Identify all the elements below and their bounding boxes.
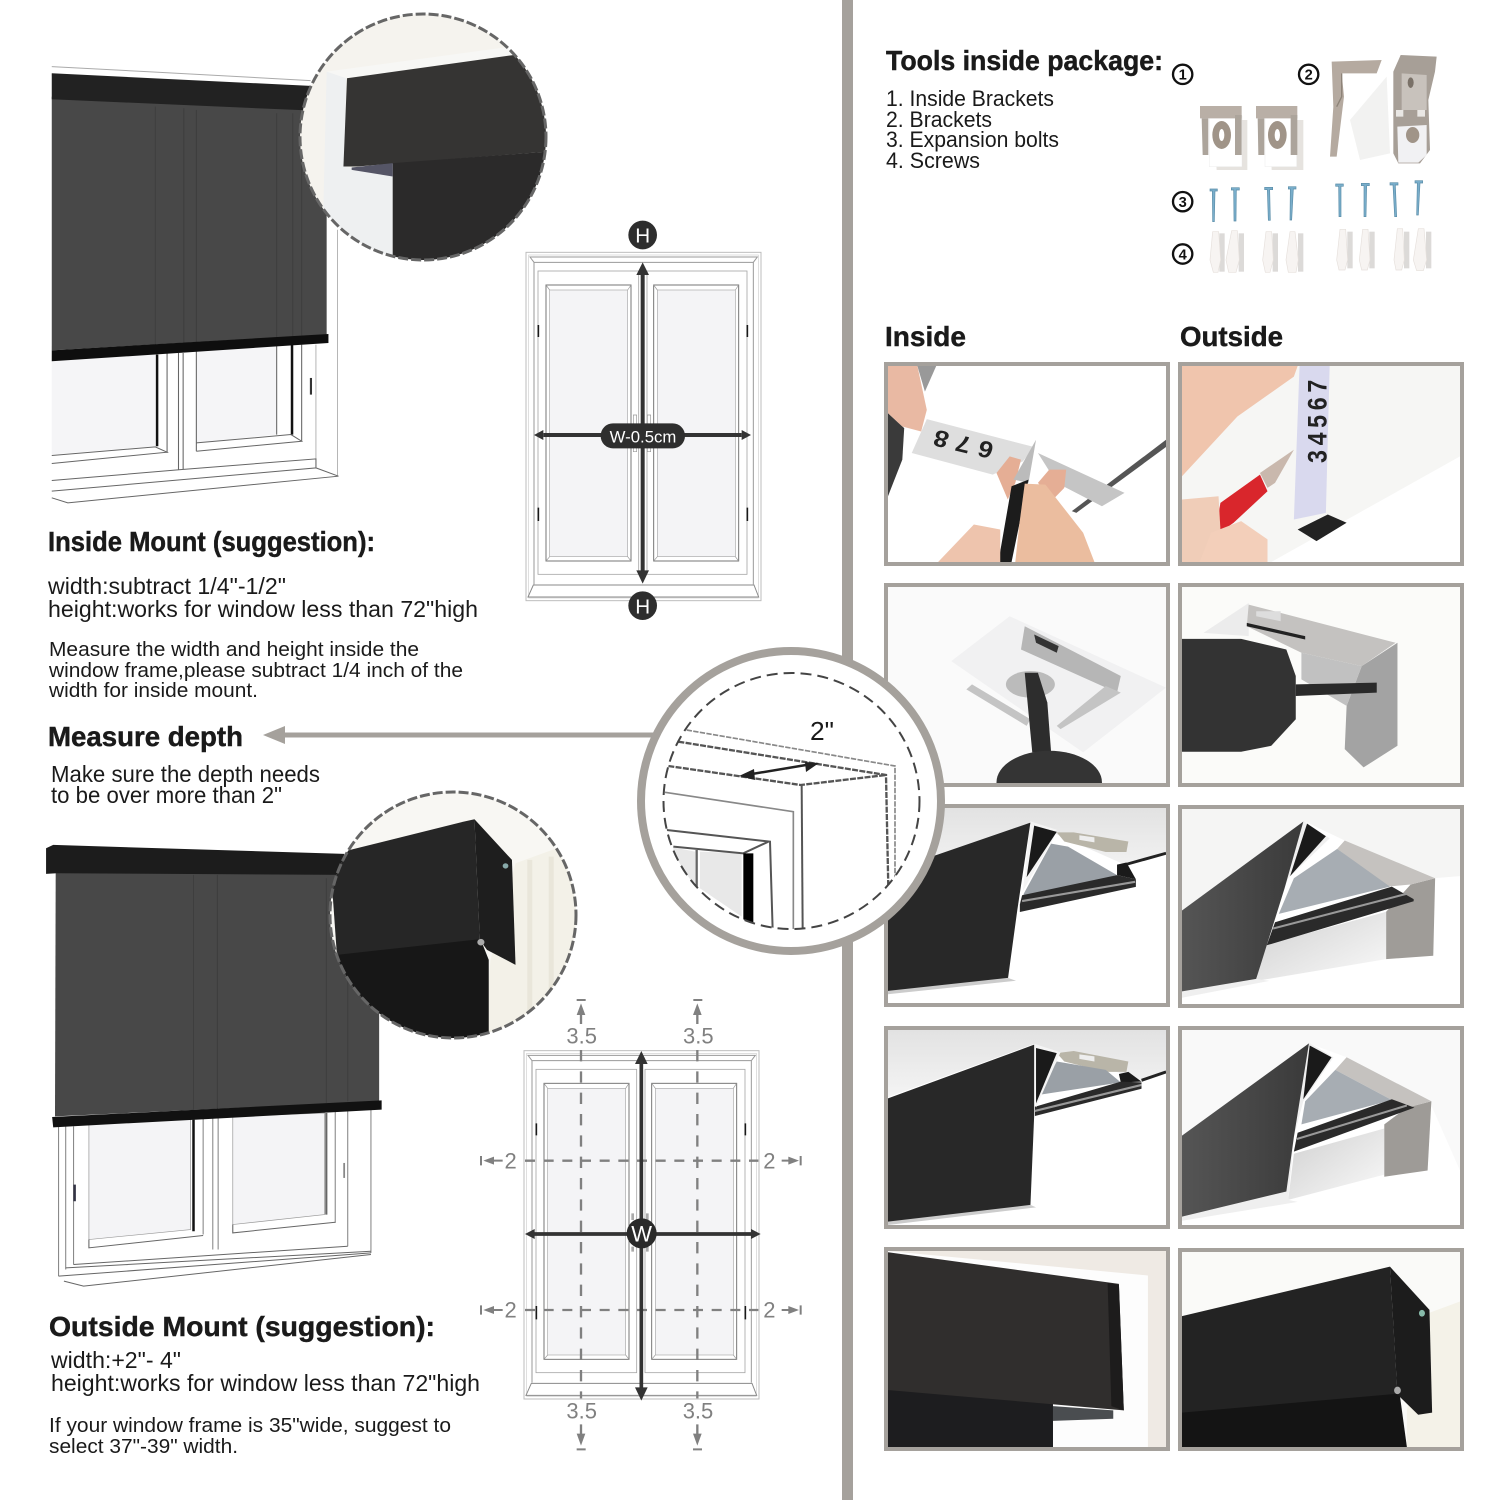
heading: Inside: Inside bbox=[885, 321, 966, 352]
panel: inside step 4, headrail seated bbox=[886, 1028, 1168, 1227]
image: hardware parts: 3 bbox=[1179, 195, 1187, 211]
labels: 3.5 top: 3.5 bbox=[683, 1023, 714, 1048]
panel: outside step 2, drilling bbox=[1180, 585, 1462, 785]
text: inside mount instructions bbox=[48, 638, 463, 702]
panel: inside step 3, clipping headrail bbox=[886, 806, 1168, 1005]
labels: 2 right: 2 bbox=[763, 1148, 775, 1173]
labels: 2 right: 2 bbox=[763, 1298, 775, 1323]
panel: inside step 1, measuring: 678 bbox=[922, 422, 997, 463]
diagram: outside mount window with overlap measurements bbox=[481, 1000, 801, 1449]
panel: outside mount illustration bbox=[46, 792, 580, 1286]
text: outside mount instructions bbox=[49, 1414, 451, 1458]
diagram: inside mount window with H and W arrows bbox=[526, 221, 761, 620]
text: inside mount instructions: window frame,please subtract 1/4 inch of the bbox=[48, 659, 463, 682]
heading: outside mount: Outside Mount (suggestion): bbox=[49, 1311, 435, 1342]
panel: inside finished valance bbox=[886, 1249, 1168, 1449]
panel: outside step 4, headrail seated bbox=[1180, 1028, 1462, 1227]
number markers bbox=[1173, 65, 1318, 264]
panel: outside step 1, measuring bbox=[1180, 364, 1462, 564]
image: hardware parts bbox=[1173, 55, 1437, 272]
arrow: depth callout to heading bbox=[263, 726, 660, 744]
text: tool list bbox=[886, 86, 1059, 173]
heading: Outside: Outside bbox=[1180, 321, 1283, 352]
image: hardware parts: 4 bbox=[1179, 247, 1188, 263]
text: inside mount size rules: width:subtract 1/4"-1/2" bbox=[47, 573, 286, 599]
callout: outside mount headrail close-up bbox=[330, 792, 580, 1040]
text: outside mount size rules: width:+2"- 4" bbox=[50, 1347, 181, 1373]
panel: inside step 2, drilling bbox=[886, 585, 1168, 814]
panel: inside step 1, measuring bbox=[886, 364, 1168, 564]
callout: inside mount headrail close-up bbox=[300, 14, 550, 266]
text: tool list: 2. Brackets bbox=[886, 107, 992, 132]
panel: outside step 3, clipping headrail bbox=[1180, 807, 1462, 1006]
labels: 3.5 top: 3.5 bbox=[566, 1023, 597, 1048]
text: outside mount size rules bbox=[50, 1347, 480, 1396]
labels: 2 left: 2 bbox=[505, 1298, 517, 1323]
labels: 2 right bbox=[763, 1148, 801, 1323]
label: W bbox=[627, 1218, 657, 1248]
labels: 3.5 bottom: 3.5 bbox=[683, 1398, 713, 1423]
text: outside mount size rules: height:works for window less than 72"high bbox=[51, 1370, 480, 1396]
label: W-0.5cm: W-0.5cm bbox=[610, 427, 676, 446]
label: H bottom bbox=[628, 591, 657, 620]
labels: 2 left bbox=[481, 1148, 517, 1323]
icon: expansion bolts bbox=[1210, 181, 1423, 222]
illustration: window with inside mount shade bbox=[52, 67, 338, 503]
label: H top bbox=[628, 221, 657, 249]
text: tool list: 3. Expansion bolts bbox=[886, 127, 1059, 152]
image: hardware parts: 2 bbox=[1305, 68, 1313, 84]
text: depth note: Make sure the depth needs bbox=[51, 761, 320, 787]
label: H bottom: H bbox=[635, 595, 650, 618]
icon: brackets bbox=[1330, 55, 1437, 163]
labels: 2 left: 2 bbox=[505, 1148, 517, 1173]
text: outside mount instructions: select 37"-39" width. bbox=[49, 1435, 238, 1458]
label: 2 inch: 2" bbox=[810, 716, 834, 746]
illustration: window with outside mount shade bbox=[46, 845, 382, 1286]
icon: inside brackets bbox=[1200, 106, 1303, 170]
text: inside mount instructions: Measure the width and height inside the bbox=[49, 638, 419, 661]
image: hardware parts: 1 bbox=[1179, 68, 1187, 84]
label: W-0.5cm bbox=[601, 423, 685, 448]
text: tool list: 4. Screws bbox=[886, 148, 980, 173]
text: depth note bbox=[51, 761, 320, 808]
icon: screws bbox=[1210, 229, 1431, 272]
panel: inside mount illustration bbox=[52, 14, 550, 503]
panel: outside step 1, measuring: 34567 bbox=[1303, 375, 1333, 463]
panel: outside finished valance bbox=[1180, 1250, 1462, 1449]
text: inside mount instructions: width for inside mount. bbox=[48, 679, 258, 702]
labels: 3.5 bottom: 3.5 bbox=[566, 1398, 597, 1423]
heading: measure depth: Measure depth bbox=[48, 721, 243, 752]
divider: vertical bar bbox=[842, 0, 853, 1500]
labels: 3.5 bottom bbox=[566, 1398, 713, 1449]
text: outside mount instructions: If your window frame is 35"wide, suggest to bbox=[49, 1414, 451, 1437]
labels: 3.5 top bbox=[566, 1000, 714, 1048]
heading: tools inside package: Tools inside package: bbox=[886, 45, 1163, 76]
arrow: depth double arrow bbox=[739, 762, 819, 780]
label: W: W bbox=[631, 1222, 652, 1247]
label: H top: H bbox=[635, 225, 650, 248]
text: inside mount size rules bbox=[47, 573, 478, 622]
callout: 2 inch depth close-up bbox=[641, 651, 941, 951]
text: inside mount size rules: height:works for window less than 72"high bbox=[48, 596, 478, 622]
text: tool list: 1. Inside Brackets bbox=[886, 86, 1054, 111]
heading: inside mount: Inside Mount (suggestion): bbox=[48, 526, 375, 557]
text: depth note: to be over more than 2" bbox=[51, 782, 282, 808]
